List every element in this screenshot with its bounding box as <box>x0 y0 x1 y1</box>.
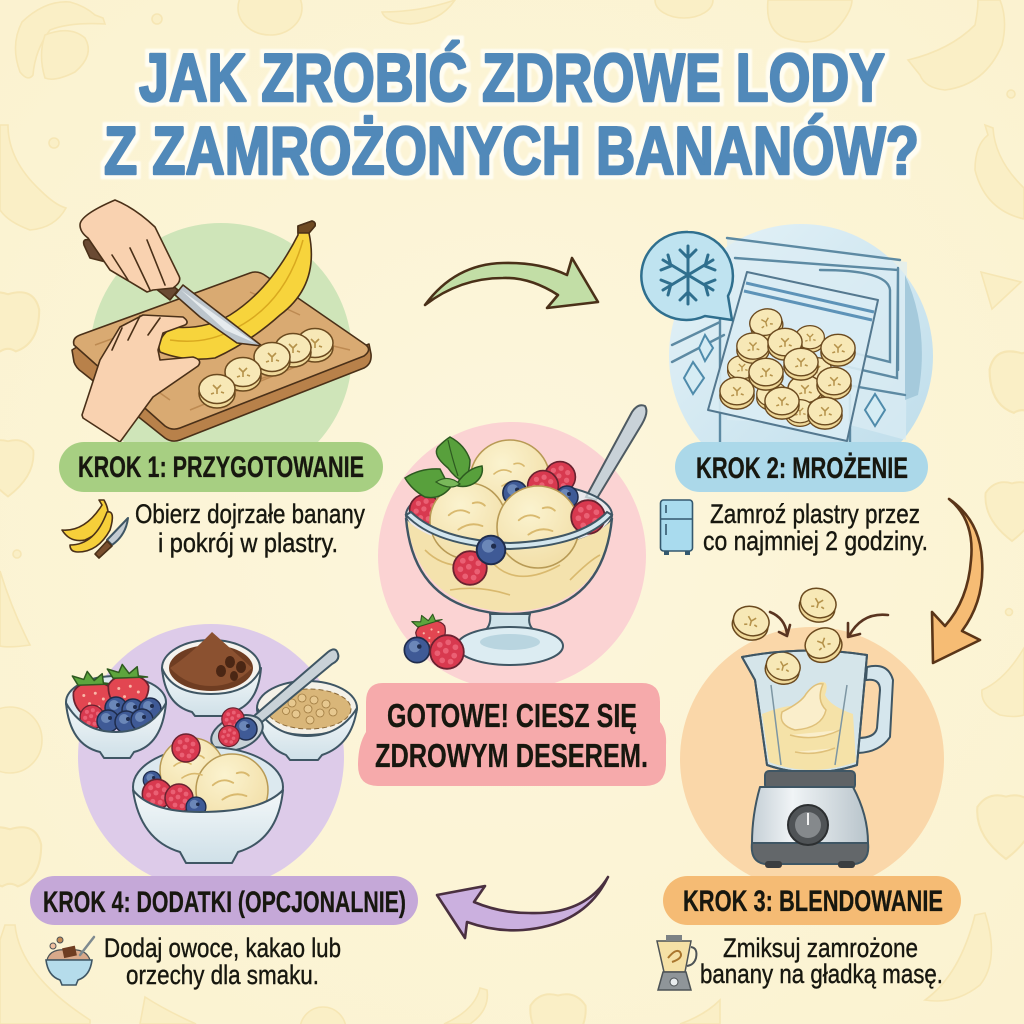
step 2 label pill <box>675 442 928 492</box>
step 1 label pill: KROK 1: PRZYGOTOWANIE <box>78 451 364 484</box>
circle backdrop: finished dessert <box>378 422 646 690</box>
panel: step 3 blending <box>657 584 961 990</box>
step 4 description <box>104 933 341 990</box>
step 1 label pill <box>59 442 383 492</box>
panel: step 1 preparation <box>59 200 383 558</box>
step 3 label pill <box>663 876 961 925</box>
panel: step 4 toppings <box>30 624 418 990</box>
icon: bananas and knife <box>62 500 128 558</box>
step 2 description: Zamroź plastry przez <box>710 499 920 529</box>
step 4 description: Dodaj owoce, kakao lub <box>104 933 341 963</box>
finished dessert message blob: ZDROWYM DESEREM. <box>375 737 648 774</box>
illustration: freezer with bag of banana slices <box>672 238 922 452</box>
illustration: blender with falling banana slices <box>729 584 893 868</box>
arrow: step 3 to step 4 <box>437 877 608 938</box>
arrow: step 1 to step 2 <box>425 258 598 308</box>
step 3 description: banany na gładką masę. <box>700 959 943 989</box>
illustration: cutting board with banana and hands <box>72 200 371 442</box>
step 4 label pill: KROK 4: DODATKI (OPCJONALNIE) <box>43 886 406 919</box>
finished dessert message blob: GOTOWE! CIESZ SIĘ <box>387 697 637 734</box>
step 1 description: Obierz dojrzałe banany <box>135 499 365 529</box>
step 3 description <box>700 933 943 989</box>
circle backdrop: step 4 <box>78 624 344 890</box>
circle backdrop: step 3 <box>680 627 944 891</box>
step 1 description: i pokrój w plastry. <box>158 528 338 558</box>
illustration: ice cream sundae glass <box>404 405 646 669</box>
panel: step 2 freezing <box>641 224 933 556</box>
icon: small blender <box>657 935 696 990</box>
icon: fridge <box>660 500 692 555</box>
illustration: bowls of toppings <box>66 632 357 863</box>
circle backdrop: step 1 <box>90 223 352 485</box>
icon: snowflake speech bubble <box>641 232 733 320</box>
step 2 description <box>703 499 928 556</box>
panel: finished dessert <box>358 405 666 786</box>
arrow: step 2 to step 3 <box>932 499 982 663</box>
step 2 description: co najmniej 2 godziny. <box>703 526 928 556</box>
circle backdrop: step 2 <box>669 224 933 488</box>
icon: small toppings bowl <box>46 937 94 985</box>
step 1 description <box>135 499 365 558</box>
step 3 description: Zmiksuj zamrożone <box>723 933 918 963</box>
step 2 label pill: KROK 2: MROŻENIE <box>696 452 908 485</box>
step 4 description: orzechy dla smaku. <box>126 960 319 990</box>
finished dessert message blob <box>358 683 666 786</box>
title <box>104 40 919 189</box>
step 4 label pill <box>30 876 418 925</box>
